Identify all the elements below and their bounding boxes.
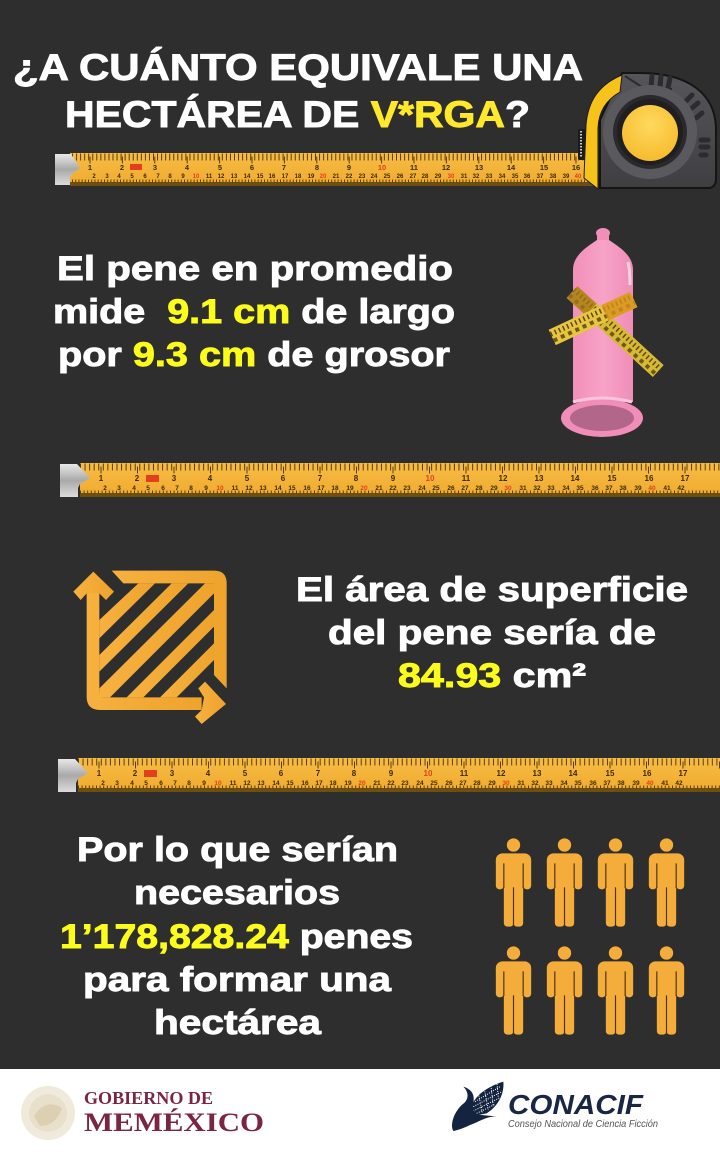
ruler: second tape: 3 <box>172 474 177 483</box>
ruler: title tape: 13 <box>231 174 238 180</box>
text block: surface area: 84.93 cm² <box>398 657 586 695</box>
ruler: title tape: 5 <box>130 174 134 180</box>
logo: emblem <box>21 1086 75 1140</box>
ruler: second tape: 18 <box>331 485 339 492</box>
ruler: third tape: 21 <box>373 780 381 787</box>
ruler: third tape: 7 <box>316 769 321 778</box>
ruler: title tape: 26 <box>397 174 404 180</box>
ruler: title tape: 3 <box>105 174 109 180</box>
ruler: title tape: 2 <box>92 174 96 180</box>
ruler: title tape: 40 <box>575 174 582 180</box>
ruler: third tape: 17 <box>315 780 323 787</box>
text block: average size: por 9.3 cm de grosor <box>58 336 450 374</box>
ruler: title tape: 23 <box>359 174 366 180</box>
ruler: second tape: 24 <box>418 485 426 492</box>
ruler: third tape: 14 <box>272 780 280 787</box>
ruler: third tape: 5 <box>144 780 148 787</box>
ruler: third tape: 35 <box>574 780 582 787</box>
ruler: second tape: 34 <box>562 485 570 492</box>
ruler: third tape: 4 <box>130 780 134 787</box>
ruler: second tape: 25 <box>432 485 440 492</box>
ruler: third tape: 29 <box>488 780 496 787</box>
ruler: third tape: 18 <box>329 780 337 787</box>
ruler: second tape: 29 <box>490 485 498 492</box>
text block: number needed: 1’178,828.24 penes <box>60 918 413 956</box>
ruler: title tape: 31 <box>461 174 468 180</box>
ruler: title tape: 20 <box>320 174 327 180</box>
ruler: second tape: 33 <box>547 485 555 492</box>
ruler: third tape: 22 <box>387 780 395 787</box>
ruler: title tape: 19 <box>308 174 315 180</box>
ruler: third tape: 26 <box>445 780 453 787</box>
ruler: third tape: 11 <box>460 769 469 778</box>
ruler: title tape: 18 <box>295 174 302 180</box>
ruler: second tape: 4 <box>208 474 213 483</box>
ruler: title tape: 13 <box>475 163 483 172</box>
ruler: third tape: 14 <box>569 769 578 778</box>
ruler: title tape: 14 <box>507 163 516 172</box>
ruler: second tape: 36 <box>591 485 599 492</box>
ruler: second tape: 12 <box>245 485 253 492</box>
ruler: third tape: 38 <box>617 780 625 787</box>
ruler: third tape: 36 <box>589 780 597 787</box>
logo: CONACIF <box>508 1089 658 1130</box>
ruler: third tape: 6 <box>159 780 163 787</box>
ruler: second tape: 14 <box>274 485 282 492</box>
ruler: title tape: 14 <box>244 174 251 180</box>
ruler: title tape: 7 <box>282 163 286 172</box>
text block: average size <box>53 250 455 374</box>
ruler: third tape: 3 <box>170 769 175 778</box>
text block: number needed: para formar una <box>83 961 392 999</box>
ruler: third tape: 3 <box>115 780 119 787</box>
ruler: third tape: 2 <box>133 769 138 778</box>
ruler: title tape: 9 <box>181 174 185 180</box>
ruler: title tape: 11 <box>206 174 213 180</box>
ruler: title tape <box>55 153 595 186</box>
ruler: title tape: 22 <box>346 174 353 180</box>
ruler: third tape: 27 <box>459 780 467 787</box>
logo: Gobierno de México <box>84 1088 264 1137</box>
ruler: third tape: 2 <box>101 780 105 787</box>
ruler: second tape: 2 <box>103 485 107 492</box>
ruler: third tape: 7 <box>173 780 177 787</box>
ruler: third tape: 9 <box>389 769 394 778</box>
ruler: second tape: 19 <box>346 485 354 492</box>
ruler: title tape: 6 <box>143 174 147 180</box>
ruler: second tape: 10 <box>426 474 435 483</box>
ruler: second tape: 14 <box>571 474 580 483</box>
ruler: second tape: 35 <box>576 485 584 492</box>
ruler: third tape: 30 <box>502 780 510 787</box>
ruler: title tape: 12 <box>442 163 450 172</box>
footer band <box>0 1069 720 1155</box>
ruler: second tape: 17 <box>317 485 325 492</box>
ruler: third tape: 6 <box>279 769 284 778</box>
icon: tape measure case <box>578 73 716 189</box>
ruler: third tape: 12 <box>497 769 506 778</box>
ruler: third tape <box>58 758 720 792</box>
ruler: second tape: 8 <box>354 474 359 483</box>
ruler: third tape: 39 <box>632 780 640 787</box>
ruler: second tape: 3 <box>117 485 121 492</box>
ruler: second tape: 10 <box>216 485 224 492</box>
text block: average size: El pene en promedio <box>57 250 453 288</box>
ruler: title tape: 33 <box>486 174 493 180</box>
ruler: title tape: 1 <box>88 163 92 172</box>
ruler: title tape: 25 <box>384 174 391 180</box>
text block: surface area: El área de superficie <box>296 571 688 609</box>
ruler: third tape: 15 <box>286 780 294 787</box>
ruler: third tape: 8 <box>187 780 191 787</box>
ruler: second tape: 42 <box>677 485 685 492</box>
ruler: second tape: 4 <box>132 485 136 492</box>
ruler: second tape: 38 <box>619 485 627 492</box>
icon: surface area square <box>73 571 227 724</box>
ruler: second tape: 1 <box>99 474 104 483</box>
text block: surface area <box>296 571 688 695</box>
ruler: title tape: 34 <box>499 174 506 180</box>
ruler: second tape: 7 <box>318 474 323 483</box>
ruler: second tape: 6 <box>281 474 286 483</box>
ruler: third tape: 42 <box>675 780 683 787</box>
logo: Gobierno de México: MEMÉXICO <box>84 1108 264 1137</box>
ruler: third tape: 31 <box>517 780 525 787</box>
ruler: second tape: 28 <box>475 485 483 492</box>
ruler: title tape: 39 <box>563 174 570 180</box>
ruler: title tape: 28 <box>422 174 429 180</box>
ruler: title tape: 37 <box>537 174 544 180</box>
ruler: third tape: 16 <box>301 780 309 787</box>
ruler: title tape: 21 <box>333 174 340 180</box>
ruler: second tape: 41 <box>663 485 671 492</box>
ruler: title tape: 38 <box>550 174 557 180</box>
text block: number needed: necesarios <box>134 874 340 912</box>
ruler: title tape: 15 <box>540 163 548 172</box>
ruler: second tape: 5 <box>245 474 250 483</box>
ruler: title tape: 29 <box>435 174 442 180</box>
text block: average size: mide 9.1 cm de largo <box>53 293 455 331</box>
ruler: title tape: 8 <box>315 163 319 172</box>
ruler: third tape: 32 <box>531 780 539 787</box>
ruler: title tape: 36 <box>524 174 531 180</box>
ruler: second tape: 16 <box>645 474 654 483</box>
ruler: second tape: 2 <box>135 474 140 483</box>
ruler: third tape: 12 <box>243 780 251 787</box>
text block: number needed: Por lo que serían <box>77 831 398 869</box>
ruler: second tape: 17 <box>681 474 690 483</box>
ruler: title tape: 5 <box>218 163 222 172</box>
ruler: second tape: 13 <box>259 485 267 492</box>
ruler: second tape: 27 <box>461 485 469 492</box>
ruler: second tape: 32 <box>533 485 541 492</box>
ruler: third tape: 23 <box>401 780 409 787</box>
logo: corn icon <box>452 1082 503 1131</box>
ruler: third tape: 16 <box>643 769 652 778</box>
ruler: title tape: 16 <box>572 163 580 172</box>
ruler: title tape: 27 <box>410 174 417 180</box>
ruler: title tape: 8 <box>168 174 172 180</box>
ruler: second tape: 16 <box>303 485 311 492</box>
ruler: title tape: 30 <box>448 174 455 180</box>
ruler: second tape: 31 <box>519 485 527 492</box>
ruler: second tape: 15 <box>608 474 617 483</box>
ruler: title tape: 4 <box>185 163 190 172</box>
ruler: second tape <box>60 463 720 497</box>
ruler: second tape: 9 <box>391 474 396 483</box>
ruler: third tape: 1 <box>97 769 102 778</box>
ruler: title tape: 32 <box>473 174 480 180</box>
title <box>13 47 583 135</box>
ruler: title tape: 35 <box>512 174 519 180</box>
yellow strap <box>584 75 622 189</box>
ruler: title tape: 17 <box>282 174 289 180</box>
ruler: third tape: 20 <box>358 780 366 787</box>
ruler: third tape: 15 <box>606 769 615 778</box>
ruler: third tape: 28 <box>473 780 481 787</box>
ruler: third tape: 9 <box>202 780 206 787</box>
title: HECTÁREA DE V*RGA ? <box>65 94 530 135</box>
ruler: third tape: 40 <box>646 780 654 787</box>
ruler: third tape: 11 <box>230 780 237 787</box>
ruler: second tape: 13 <box>535 474 544 483</box>
ruler: second tape: 12 <box>499 474 508 483</box>
ruler: title tape: 16 <box>269 174 276 180</box>
ruler: second tape: 39 <box>634 485 642 492</box>
ruler: title tape: 15 <box>257 174 264 180</box>
ruler: second tape: 40 <box>648 485 656 492</box>
ruler: third tape: 37 <box>603 780 611 787</box>
ruler: third tape: 19 <box>344 780 352 787</box>
ruler: title tape: 10 <box>378 163 386 172</box>
text block: surface area: del pene sería de <box>328 614 656 652</box>
icon: people grid <box>496 838 684 1035</box>
ruler: third tape: 17 <box>679 769 688 778</box>
ruler: title tape: 9 <box>347 163 351 172</box>
ruler: third tape: 33 <box>545 780 553 787</box>
ruler: second tape: 9 <box>204 485 208 492</box>
ruler: third tape: 13 <box>257 780 265 787</box>
ruler: second tape: 30 <box>504 485 512 492</box>
ruler: second tape: 22 <box>389 485 397 492</box>
icon: yellow knob <box>622 105 678 161</box>
logo: CONACIF: CONACIF <box>508 1089 644 1120</box>
ruler: title tape: 6 <box>250 163 254 172</box>
ruler: third tape: 10 <box>214 780 222 787</box>
text block: number needed: hectárea <box>154 1004 322 1042</box>
ruler: third tape: 4 <box>206 769 211 778</box>
ruler: second tape: 7 <box>175 485 179 492</box>
ruler: third tape: 5 <box>243 769 248 778</box>
ruler: second tape: 5 <box>146 485 150 492</box>
ruler: second tape: 11 <box>462 474 471 483</box>
ruler: third tape: 34 <box>560 780 568 787</box>
ruler: third tape: 13 <box>533 769 542 778</box>
ruler: second tape: 11 <box>232 485 239 492</box>
ruler: third tape: 8 <box>352 769 357 778</box>
ruler: third tape: 24 <box>416 780 424 787</box>
logo: CONACIF: Consejo Nacional de Ciencia Ficción <box>508 1119 658 1130</box>
ruler: title tape: 10 <box>193 174 200 180</box>
ruler: title tape: 7 <box>156 174 160 180</box>
ruler: title tape: 12 <box>218 174 225 180</box>
title: ¿A CUÁNTO EQUIVALE UNA <box>13 47 583 88</box>
ruler: second tape: 15 <box>288 485 296 492</box>
ruler: second tape: 20 <box>360 485 368 492</box>
ruler: title tape: 3 <box>153 163 157 172</box>
ruler: title tape: 4 <box>117 174 121 180</box>
ruler: third tape: 41 <box>661 780 669 787</box>
ruler: third tape: 25 <box>430 780 438 787</box>
icon: condom with measuring tape <box>549 228 664 437</box>
ruler: title tape: 11 <box>410 163 418 172</box>
ruler: third tape: 10 <box>424 769 433 778</box>
ruler: title tape: 2 <box>120 163 124 172</box>
ruler: second tape: 26 <box>447 485 455 492</box>
ruler: second tape: 21 <box>375 485 383 492</box>
ruler: second tape: 8 <box>189 485 193 492</box>
ruler: second tape: 6 <box>161 485 165 492</box>
logo: Gobierno de México: GOBIERNO DE <box>84 1088 213 1108</box>
ruler: second tape: 37 <box>605 485 613 492</box>
text block: number needed <box>60 831 413 1042</box>
ruler: second tape: 23 <box>403 485 411 492</box>
ruler: title tape: 24 <box>371 174 378 180</box>
